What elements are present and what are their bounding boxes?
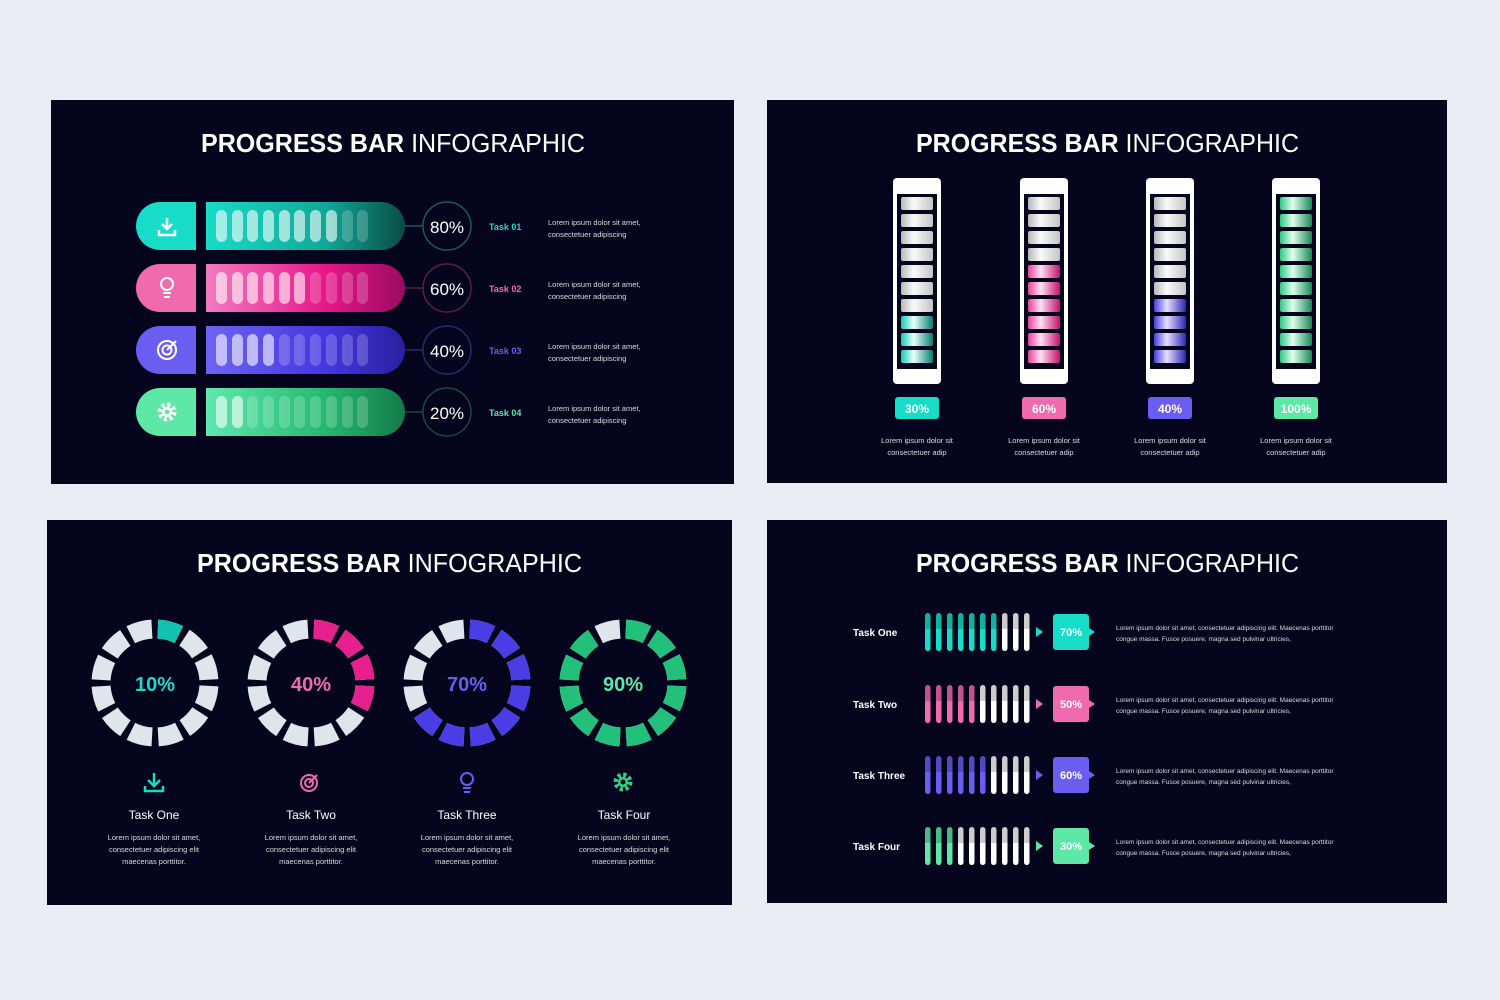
row: task 02 — [136, 264, 641, 312]
row: task four 30% — [853, 827, 1334, 865]
panel: horizontal progress bars — [51, 100, 734, 484]
ring 2: 40% — [254, 626, 368, 866]
row: task 03: Lorem ipsum dolor sit amet, — [548, 342, 641, 351]
row: task one 70%: Lorem ipsum dolor sit amet, consectetuer adipiscing elit. Maecenas porttitor — [1116, 625, 1334, 632]
row: task two 50% — [853, 685, 1334, 723]
battery 2: 60%: consectetuer adip — [1014, 448, 1074, 457]
row: task three 60%: Task Three — [853, 771, 905, 782]
row: task four 30%: 30% — [1060, 841, 1082, 853]
battery 3: 40% — [1134, 178, 1207, 457]
battery 4: 100%: 100% — [1281, 402, 1312, 416]
row: task four 30%: Lorem ipsum dolor sit amet, consectetuer adipiscing elit. Maecenas porttitor — [1116, 839, 1334, 846]
ring 1: 10%: maecenas porttitor. — [122, 857, 186, 866]
battery 3: 40%: 40% — [1158, 402, 1182, 416]
row: task 04: consectetuer adipiscing — [548, 416, 626, 425]
row: task two 50%: congue massa. Fusce posuere, magna sed pulvinar ultricies, — [1116, 708, 1291, 715]
battery 1: 30%: 30% — [905, 402, 929, 416]
ring 4: 90%: Lorem ipsum dolor sit amet, — [578, 833, 670, 842]
row: task two 50%: Task Two — [853, 700, 897, 711]
row: task three 60% — [853, 756, 1334, 794]
ring 3: 70%: 70% — [447, 674, 487, 696]
row: task 02: Lorem ipsum dolor sit amet, — [548, 280, 641, 289]
ring 3: 70%: Lorem ipsum dolor sit amet, — [421, 833, 513, 842]
ring 4: 90%: Task Four — [598, 808, 650, 822]
row: task one 70%: 70% — [1060, 627, 1082, 639]
row: task 03: 40% — [430, 342, 464, 361]
ring 2: 40%: consectetuer adipiscing elit — [266, 845, 357, 854]
row: task 01: consectetuer adipiscing — [548, 230, 626, 239]
battery 3: 40%: consectetuer adip — [1140, 448, 1200, 457]
row: task three 60%: 60% — [1060, 770, 1082, 782]
ring 1: 10%: consectetuer adipiscing elit — [109, 845, 200, 854]
ring 2: 40%: 40% — [291, 674, 331, 696]
ring 4: 90% — [566, 626, 680, 866]
ring 2: 40%: maecenas porttitor. — [279, 857, 343, 866]
row: task 01: Task 01 — [489, 222, 521, 232]
title: PROGRESS BAR INFOGRAPHIC — [916, 128, 1299, 158]
row: task 03 — [136, 326, 641, 374]
battery 1: 30%: consectetuer adip — [887, 448, 947, 457]
row: task 04 — [136, 388, 641, 436]
row: task four 30%: congue massa. Fusce posuere, magna sed pulvinar ultricies, — [1116, 850, 1291, 857]
row: task 01: Lorem ipsum dolor sit amet, — [548, 218, 641, 227]
ring 4: 90%: 90% — [603, 674, 643, 696]
ring 1: 10%: Lorem ipsum dolor sit amet, — [108, 833, 200, 842]
row: task 04: Task 04 — [489, 408, 521, 418]
ring 2: 40%: Task Two — [286, 808, 336, 822]
battery 4: 100%: Lorem ipsum dolor sit — [1260, 436, 1333, 445]
battery 1: 30%: Lorem ipsum dolor sit — [881, 436, 954, 445]
row: task three 60%: Lorem ipsum dolor sit amet, consectetuer adipiscing elit. Maecenas porttitor — [1116, 768, 1334, 775]
battery 2: 60% — [1008, 178, 1081, 457]
panel: segmented bars — [767, 520, 1447, 903]
ring 1: 10% — [98, 626, 212, 866]
row: task four 30%: Task Four — [853, 842, 900, 853]
row: task two 50%: Lorem ipsum dolor sit amet, consectetuer adipiscing elit. Maecenas porttitor — [1116, 697, 1334, 704]
ring 3: 70%: Task Three — [437, 808, 497, 822]
row: task two 50%: 50% — [1060, 699, 1082, 711]
row: task 03: Task 03 — [489, 346, 521, 356]
row: task 02: 60% — [430, 280, 464, 299]
ring 3: 70%: consectetuer adipiscing elit — [422, 845, 513, 854]
battery 2: 60%: Lorem ipsum dolor sit — [1008, 436, 1081, 445]
title: PROGRESS BAR INFOGRAPHIC — [916, 548, 1299, 578]
title: PROGRESS BAR INFOGRAPHIC — [201, 128, 585, 158]
ring 4: 90%: consectetuer adipiscing elit — [579, 845, 670, 854]
battery 4: 100%: consectetuer adip — [1266, 448, 1326, 457]
row: task 02: consectetuer adipiscing — [548, 292, 626, 301]
panel: battery progress — [767, 100, 1447, 483]
title: PROGRESS BAR INFOGRAPHIC — [197, 548, 582, 578]
battery 1: 30% — [881, 178, 954, 457]
row: task 03: consectetuer adipiscing — [548, 354, 626, 363]
row: task one 70% — [853, 613, 1334, 651]
row: task one 70%: congue massa. Fusce posuere, magna sed pulvinar ultricies, — [1116, 636, 1291, 643]
row: task 01 — [136, 202, 641, 250]
ring 1: 10%: 10% — [135, 674, 175, 696]
battery 4: 100% — [1260, 178, 1333, 457]
battery 3: 40%: Lorem ipsum dolor sit — [1134, 436, 1207, 445]
row: task 02: Task 02 — [489, 284, 521, 294]
ring 3: 70%: maecenas porttitor. — [435, 857, 499, 866]
row: task 04: Lorem ipsum dolor sit amet, — [548, 404, 641, 413]
ring 3: 70% — [410, 626, 524, 866]
battery 2: 60%: 60% — [1032, 402, 1056, 416]
ring 1: 10%: Task One — [129, 808, 180, 822]
panel: ring progress — [47, 520, 732, 905]
row: task three 60%: congue massa. Fusce posuere, magna sed pulvinar ultricies, — [1116, 779, 1291, 786]
row: task 01: 80% — [430, 218, 464, 237]
ring 4: 90%: maecenas porttitor. — [592, 857, 656, 866]
row: task one 70%: Task One — [853, 628, 898, 639]
ring 2: 40%: Lorem ipsum dolor sit amet, — [265, 833, 357, 842]
row: task 04: 20% — [430, 404, 464, 423]
